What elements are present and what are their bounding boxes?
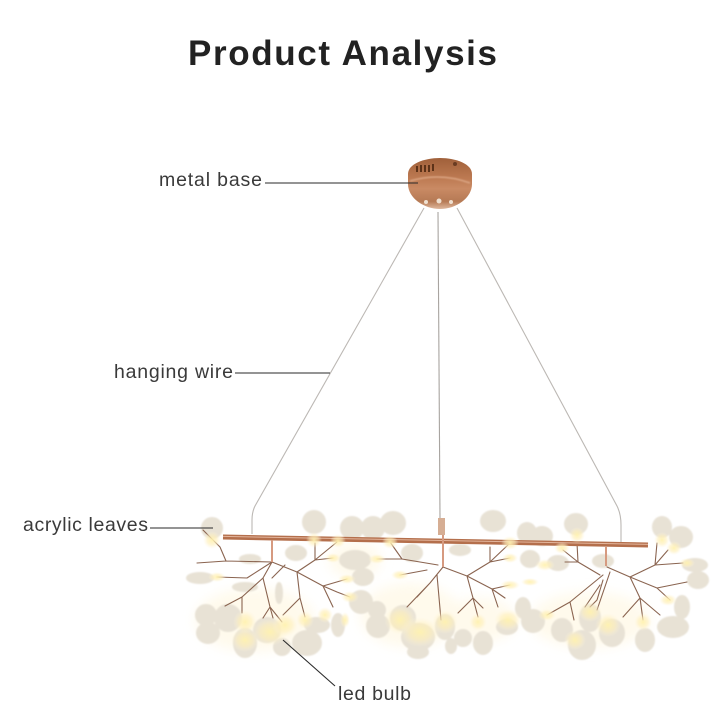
hanging wires xyxy=(252,208,621,542)
label: led bulb: led bulb xyxy=(338,683,411,705)
led bulbs xyxy=(203,527,695,652)
warm glow behind leaves xyxy=(195,542,650,652)
metal base xyxy=(408,158,472,209)
label: hanging wire: hanging wire xyxy=(114,361,233,383)
rod xyxy=(223,518,648,567)
label: acrylic leaves: acrylic leaves xyxy=(23,514,148,536)
acrylic leaves xyxy=(187,511,708,659)
label: led bulb xyxy=(283,640,411,705)
title: Product Analysis xyxy=(188,34,497,73)
branches xyxy=(197,530,687,622)
label: metal base: metal base xyxy=(159,169,262,191)
